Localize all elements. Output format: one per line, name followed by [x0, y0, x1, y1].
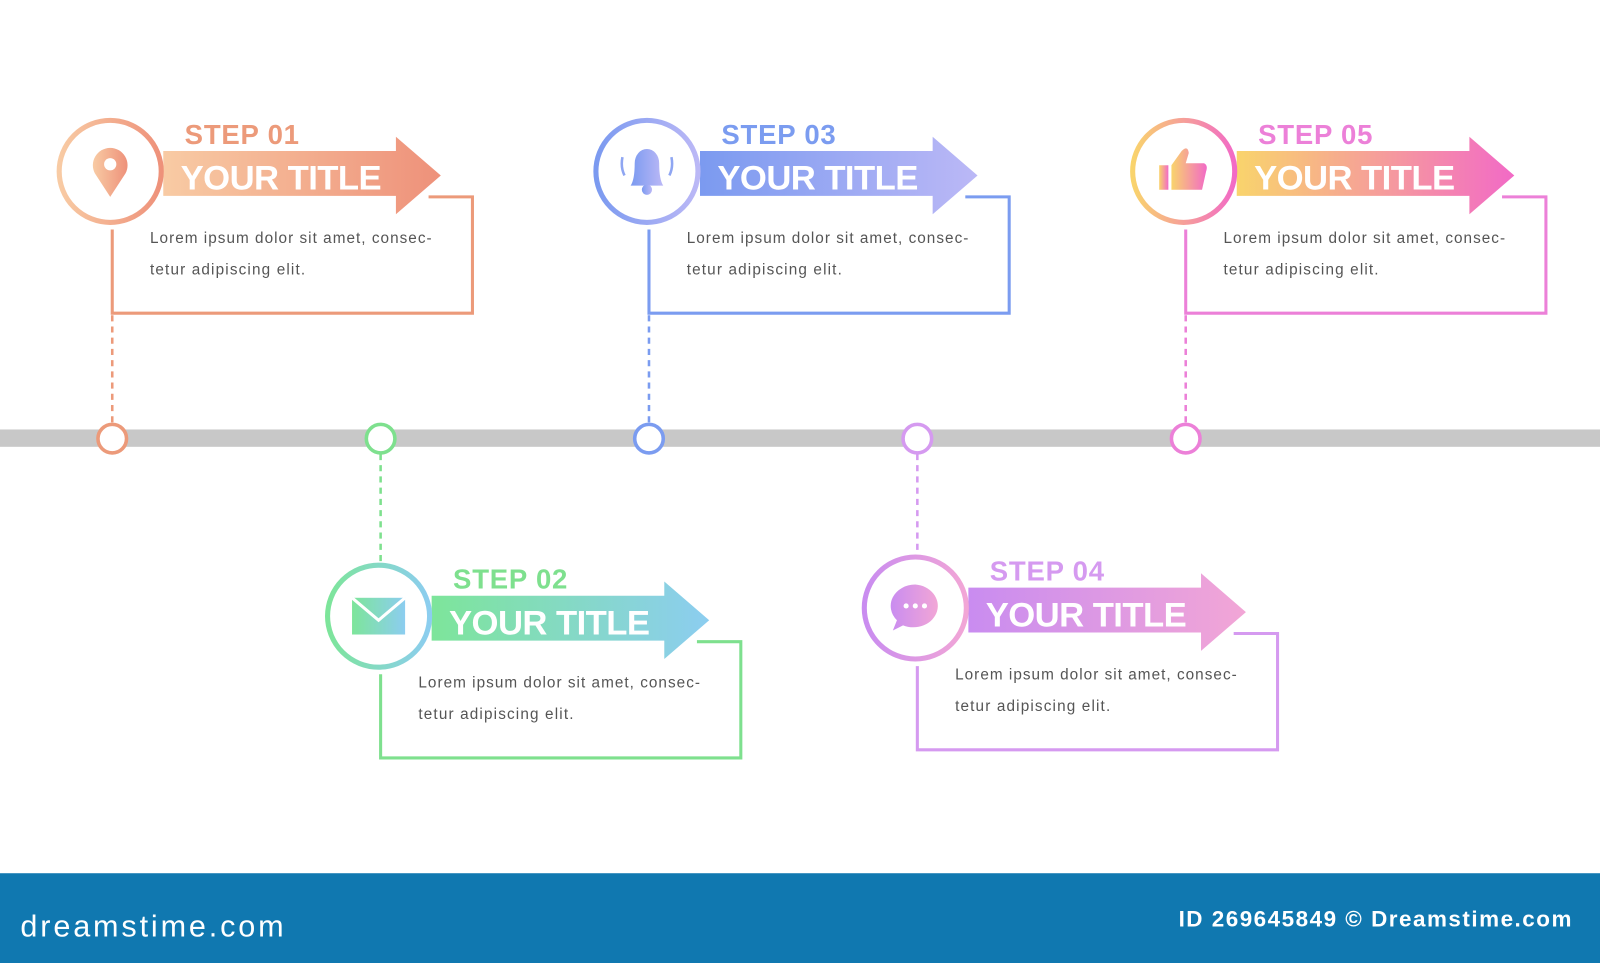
- step 04: tetur adipiscing elit.: [955, 698, 1110, 715]
- icon: map pin: [93, 148, 128, 197]
- step 04: [864, 555, 1278, 750]
- step 05: Lorem ipsum dolor sit amet, consec-: [1223, 230, 1505, 247]
- step 05: [1133, 119, 1546, 313]
- step 02: tetur adipiscing elit.: [418, 706, 573, 723]
- step 01: YOUR TITLE: [181, 160, 382, 198]
- footer: dreamstime.com: [20, 909, 284, 943]
- icon: envelope: [352, 598, 405, 635]
- timeline nodes: [98, 424, 1200, 453]
- step 05: STEP 05: [1258, 119, 1372, 150]
- connector: step 03: [648, 315, 650, 423]
- step 01: STEP 01: [185, 119, 299, 150]
- step 01: tetur adipiscing elit.: [150, 261, 305, 278]
- step 04: YOUR TITLE: [986, 596, 1187, 634]
- step 03: STEP 03: [721, 119, 836, 150]
- step 03: YOUR TITLE: [717, 160, 918, 198]
- step 03: tetur adipiscing elit.: [687, 261, 842, 278]
- step 01: [59, 119, 472, 313]
- connector: step 04: [916, 454, 919, 556]
- icon: bell: [622, 149, 672, 195]
- step 03: Lorem ipsum dolor sit amet, consec-: [687, 230, 968, 247]
- step 01: Lorem ipsum dolor sit amet, consec-: [150, 230, 432, 247]
- step 02: STEP 02: [453, 564, 567, 595]
- connector: step 02: [379, 454, 382, 563]
- step 04: Lorem ipsum dolor sit amet, consec-: [955, 666, 1237, 683]
- step 02: [328, 564, 741, 758]
- connector: step 01: [111, 315, 113, 423]
- step 03: [596, 119, 1009, 313]
- timeline bar: [0, 429, 1600, 447]
- step 05: tetur adipiscing elit.: [1223, 261, 1379, 278]
- footer: ID 269645849 © Dreamstime.com: [1179, 906, 1571, 931]
- step 05: YOUR TITLE: [1254, 160, 1455, 198]
- icon: chat bubble: [891, 585, 938, 630]
- step 02: Lorem ipsum dolor sit amet, consec-: [418, 675, 700, 692]
- connector: step 05: [1184, 315, 1187, 423]
- step 04: STEP 04: [990, 555, 1105, 586]
- footer: [0, 873, 1600, 963]
- icon: thumbs up: [1159, 148, 1207, 190]
- step 02: YOUR TITLE: [449, 605, 650, 643]
